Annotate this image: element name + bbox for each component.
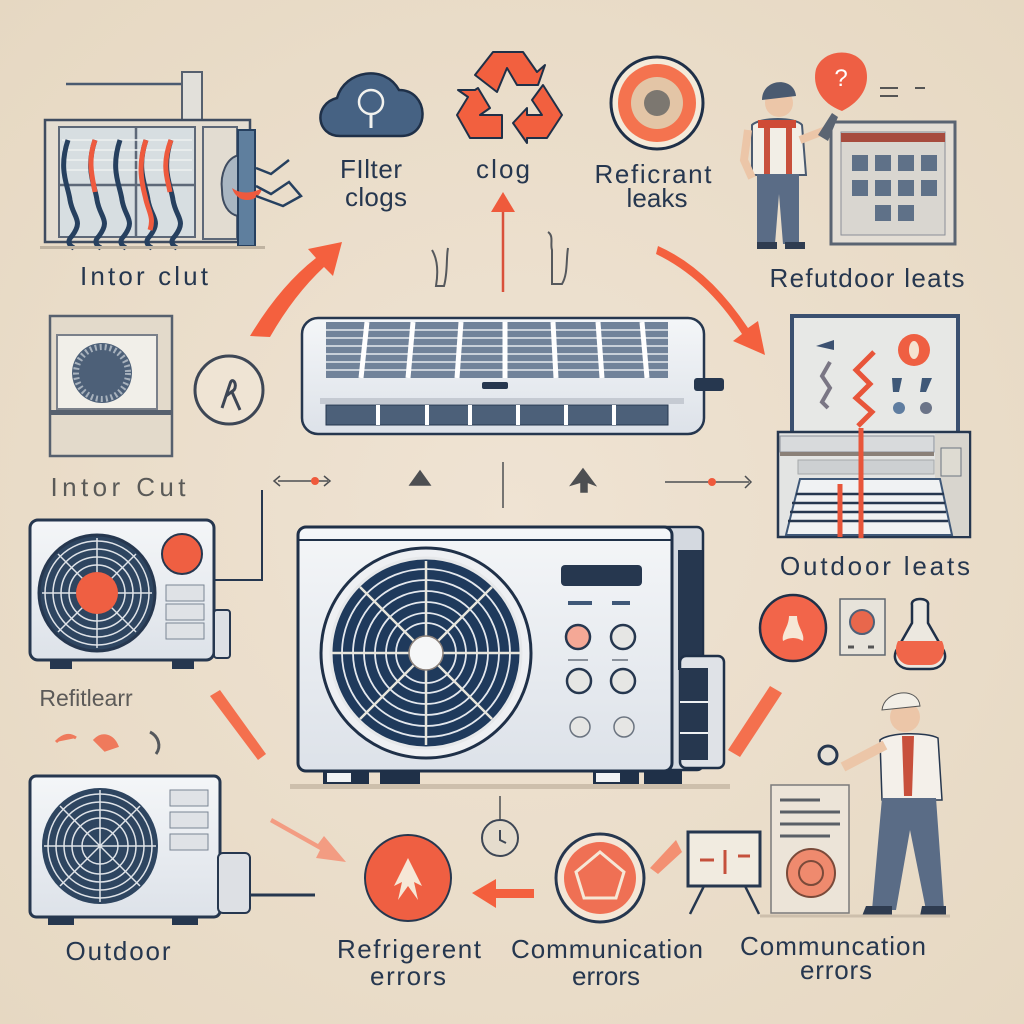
arrow: small red right <box>650 840 682 874</box>
label: Refutdoor leats: Refutdoor leats <box>770 263 964 293</box>
label: Refricant leaks: Reficrant <box>594 159 712 189</box>
icons: right row <box>760 595 945 669</box>
panel: bottom-left outdoor unit <box>30 776 315 925</box>
label: Refricant leaks: leaks <box>626 183 688 213</box>
arrow: top centre <box>491 192 515 292</box>
icon: recycle <box>457 52 562 143</box>
arrow: left between circles <box>472 879 534 908</box>
label: Refrigerent errors: errors <box>370 961 446 991</box>
panel: left outdoor unit with fan <box>30 490 262 669</box>
label: Intor cut: Intor Cut <box>50 472 186 502</box>
arrow: faint small <box>270 818 346 862</box>
label: Communication errors <box>511 934 703 991</box>
small red marks <box>56 732 159 754</box>
label: Refitlearr: Refitlearr <box>39 685 133 711</box>
icon: ribbon circle <box>195 356 263 424</box>
label: Refrigerent errors: Refrigerent <box>337 934 482 964</box>
panel: bottom-right technician <box>760 693 950 916</box>
label: Outdoor: Outdoor <box>66 936 171 966</box>
panel: top-left indoor unit <box>40 72 301 249</box>
panel: main outdoor AC unit <box>290 527 730 789</box>
icon: cloud filter <box>320 73 423 136</box>
panel: centre indoor AC unit <box>302 318 724 434</box>
arrow: bottom-right diagonal <box>728 686 782 757</box>
panel: report card <box>771 785 849 913</box>
icon: refrigerant errors circle <box>365 835 451 921</box>
panel: top-right technician and board: ? <box>834 65 848 92</box>
label: Refrigerent errors <box>337 934 482 991</box>
label: Filter clogs: clogs <box>345 182 407 212</box>
small brackets <box>432 232 568 286</box>
arrow: bottom-left diagonal <box>210 690 266 760</box>
label: Outdoor leats: Outdoor leats <box>780 551 970 581</box>
label: Intor clut top: Intor clut <box>80 261 209 291</box>
arrow: right down <box>656 246 765 355</box>
label: Filter clogs <box>340 154 407 212</box>
label: Filter clogs: FIlter <box>340 154 402 184</box>
panel: top-right technician and board <box>744 52 955 249</box>
panel: easel small chart <box>688 832 760 914</box>
icon: clock connector <box>482 796 518 856</box>
label: Communcation errors <box>740 931 926 985</box>
label: Communcation errors: errors <box>800 955 872 985</box>
connector marks row <box>274 462 751 508</box>
arrow: left up <box>250 242 342 337</box>
label: Clog: clog <box>476 154 530 184</box>
label: Communcation errors: Communcation <box>740 931 926 961</box>
label: Refricant leaks <box>594 159 712 213</box>
panel: right monitor with chart <box>778 316 970 538</box>
label: Communication errors: errors <box>572 961 640 991</box>
panel: left small outdoor box <box>50 316 172 456</box>
icon: communication errors circle <box>556 834 644 922</box>
label: Communication errors: Communication <box>511 934 703 964</box>
icon: refrigerant ring <box>611 57 703 149</box>
